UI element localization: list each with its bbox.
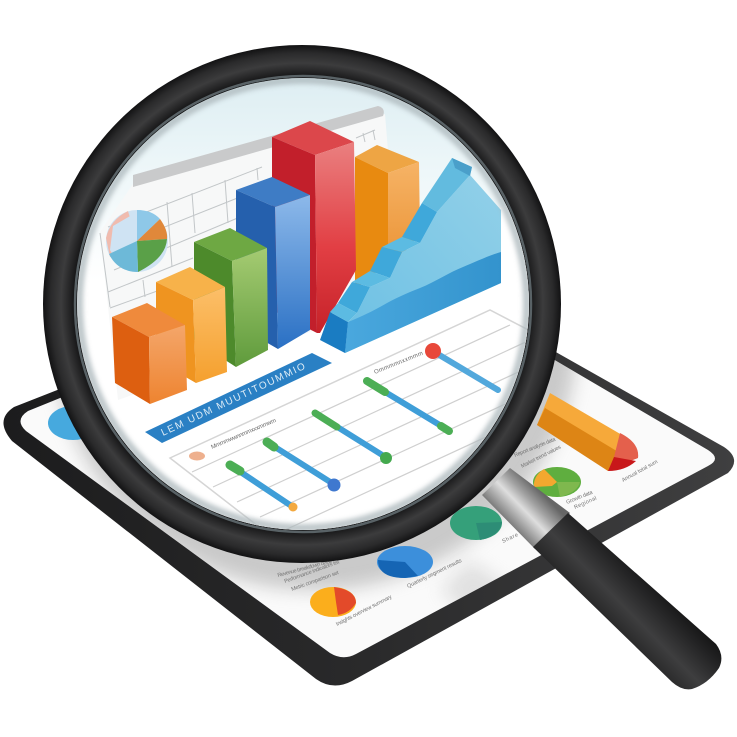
top ridge step bbox=[422, 158, 472, 212]
orange pill bar bbox=[537, 393, 638, 471]
table rows bbox=[192, 325, 540, 530]
teal pie bbox=[450, 506, 502, 540]
row marker 4 bbox=[367, 381, 449, 431]
back chart sheet bbox=[100, 106, 388, 308]
caption text lines: Share bbox=[501, 532, 519, 545]
blue banner bbox=[145, 353, 332, 443]
small table icon bbox=[189, 452, 205, 460]
pie chart in the sheet bbox=[106, 210, 168, 272]
banner text: LEM UDM MUUTITOUMMIO bbox=[160, 361, 307, 439]
blue area chart bbox=[320, 158, 501, 353]
yellow and red pie bbox=[310, 587, 356, 617]
light orange bar bbox=[156, 267, 227, 383]
outer black ring bbox=[43, 45, 561, 563]
white lower desk area bbox=[94, 205, 529, 530]
dark inner bevel bbox=[75, 76, 531, 532]
black grip bbox=[533, 513, 721, 689]
left front face bbox=[320, 312, 348, 353]
dark blue pie bbox=[377, 546, 433, 578]
caption text lines: Report analysis data bbox=[514, 436, 557, 459]
magnifying glass lens bbox=[43, 45, 561, 563]
orange bar bbox=[112, 303, 187, 404]
caption text lines bbox=[277, 436, 659, 628]
blue bar bbox=[236, 177, 310, 349]
table heading text: Mmmmwwnnmmxxxmmwm bbox=[210, 418, 277, 451]
metal ferrule bbox=[482, 468, 570, 549]
tablet screen bbox=[20, 264, 715, 657]
caption text lines: Performance indicators list bbox=[284, 559, 341, 585]
caption text lines: Growth data bbox=[566, 489, 595, 506]
shadow of the handle bbox=[442, 560, 500, 604]
caption text lines: Annual total sum bbox=[621, 459, 659, 484]
caption text lines: Market trend values bbox=[520, 444, 562, 470]
amber bar bbox=[355, 145, 420, 290]
shadow of the lens bbox=[54, 360, 582, 598]
red bar bbox=[272, 121, 356, 333]
green bar bbox=[194, 228, 268, 367]
darker lower wave bbox=[345, 252, 501, 353]
row marker 2 bbox=[267, 442, 340, 492]
glass rim shading bbox=[79, 80, 527, 528]
row marker 1 bbox=[230, 465, 298, 512]
caption text lines: Insights overview summary bbox=[335, 594, 393, 628]
table note text: Ommmmnxxmmm bbox=[374, 351, 424, 376]
row marker 3 bbox=[315, 413, 392, 464]
row marker 5 bbox=[425, 343, 498, 390]
lens contents bbox=[70, 70, 540, 540]
tablet body bbox=[3, 259, 734, 686]
screen contents bbox=[48, 360, 658, 626]
ridge step faces bbox=[402, 203, 437, 243]
light area face bbox=[345, 175, 501, 353]
caption text lines: Regional bbox=[573, 496, 598, 511]
tablet bbox=[4, 352, 734, 686]
caption text lines: Quarterly segment results bbox=[406, 558, 463, 590]
glass background bbox=[70, 70, 540, 540]
magnifying glass handle bbox=[482, 468, 721, 689]
back grid lines bbox=[100, 130, 375, 308]
lower chart table bbox=[170, 310, 540, 530]
green pie bbox=[533, 467, 581, 497]
blue pie bbox=[48, 407, 81, 440]
caption text lines: Revenue breakdown detail bbox=[277, 559, 333, 579]
caption text lines: Metric comparison set bbox=[291, 570, 340, 593]
